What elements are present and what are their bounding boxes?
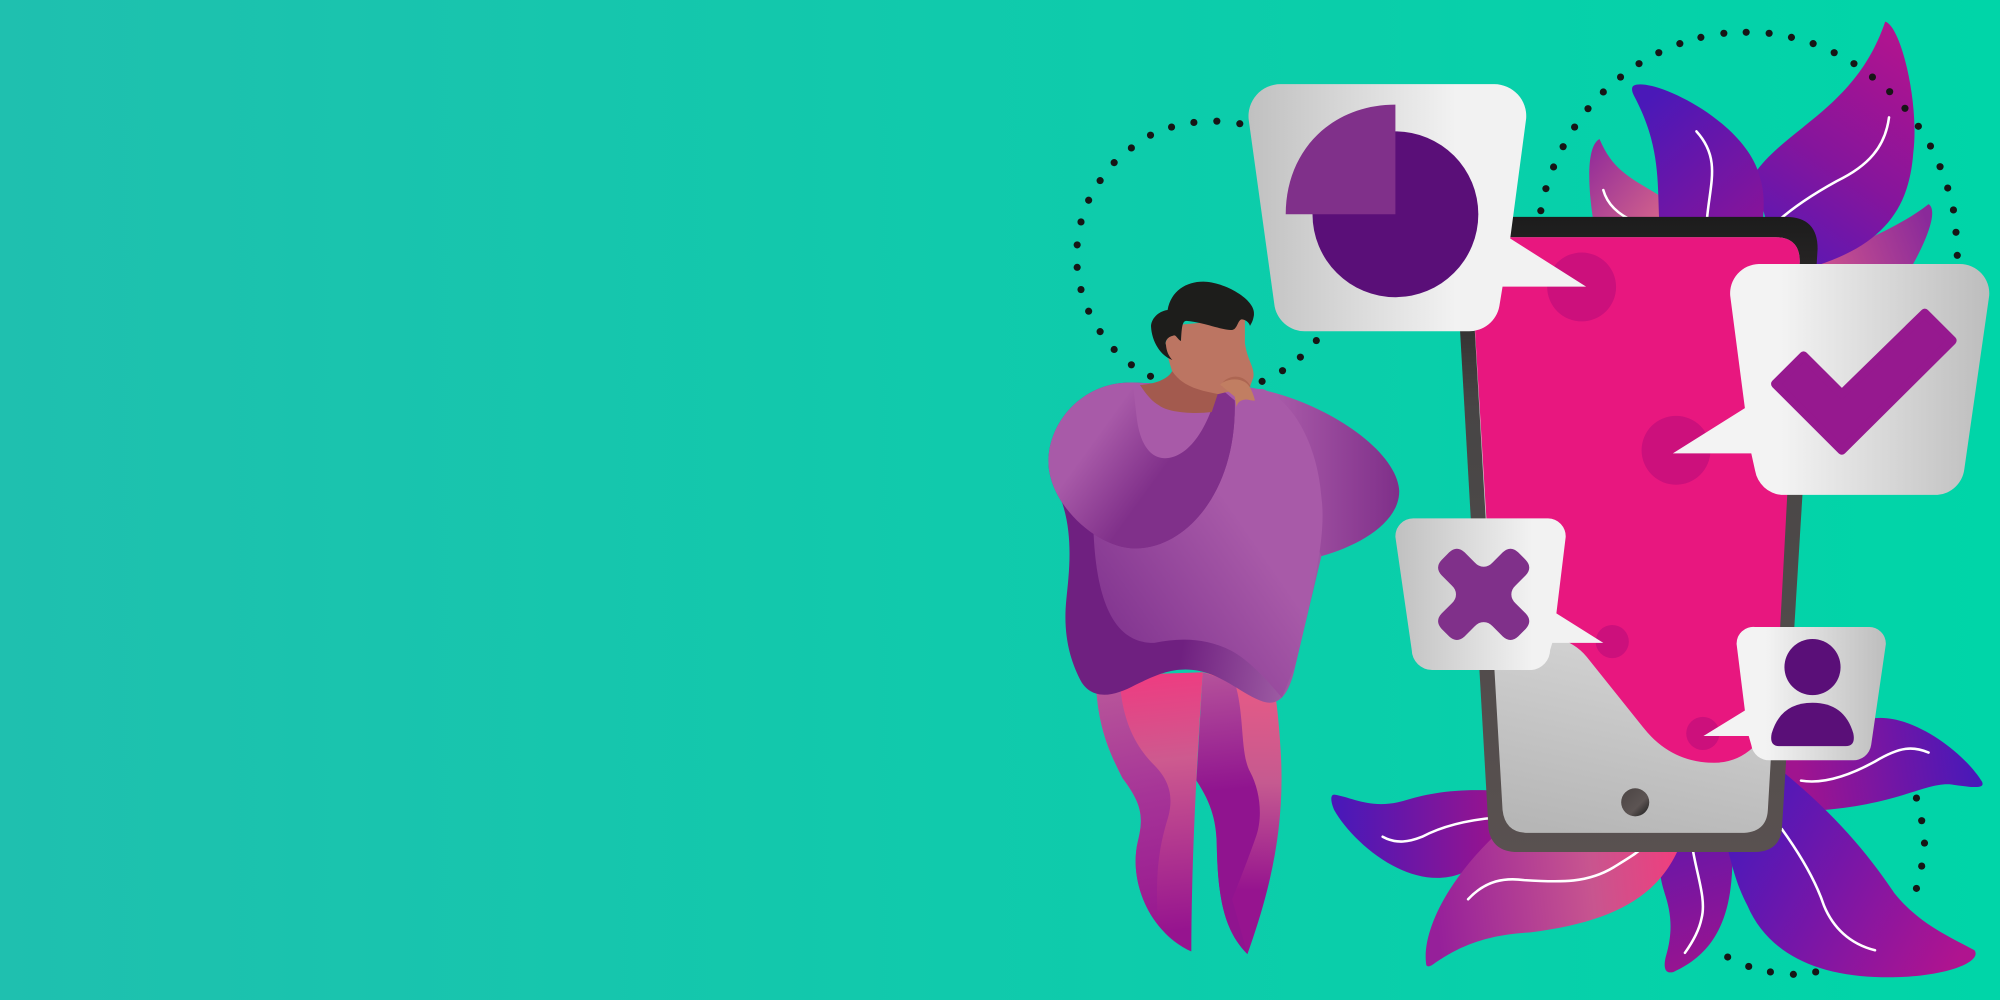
sleeve highlight [1133,383,1218,458]
face [1166,319,1254,394]
raised arm [1048,383,1235,548]
sweater front [1093,389,1323,698]
leaf: lower right [1779,718,1983,816]
leaf: small right [1805,204,1932,270]
raised arm shading [1048,383,1235,548]
leaf: narrow bottom [1658,842,1732,972]
leaf: bottom pink [1426,835,1684,966]
phone screen [1469,237,1800,833]
dotted circles [1074,29,1961,978]
bubble: check mark [1673,264,1989,495]
home button [1621,788,1649,816]
leaves behind phone, top [1589,22,1932,270]
leaves behind phone, bottom [1331,718,1983,977]
leaf: small left [1589,139,1671,227]
far arm [1244,386,1399,556]
person [1048,282,1399,954]
leaf: violet [1632,84,1764,242]
leaf: lower left [1331,790,1499,878]
bubble: pie chart [1248,84,1586,331]
screen dots [1547,253,1719,750]
check icon [1776,313,1952,450]
hair [1151,282,1254,360]
phone frame [1455,217,1818,852]
cross icon [1438,549,1529,640]
user icon [1771,639,1854,746]
hand [1220,377,1255,407]
leaf: tall magenta [1754,22,1915,270]
pink screen panel [1469,237,1800,763]
sweater body [1061,446,1321,703]
pie chart icon [1286,105,1478,297]
leaf: large bottom right [1724,773,1976,977]
trousers [1096,672,1282,954]
phone [1455,217,1818,852]
bubble: user [1703,627,1886,760]
bubble: cross [1395,518,1603,670]
neck [1140,371,1218,413]
